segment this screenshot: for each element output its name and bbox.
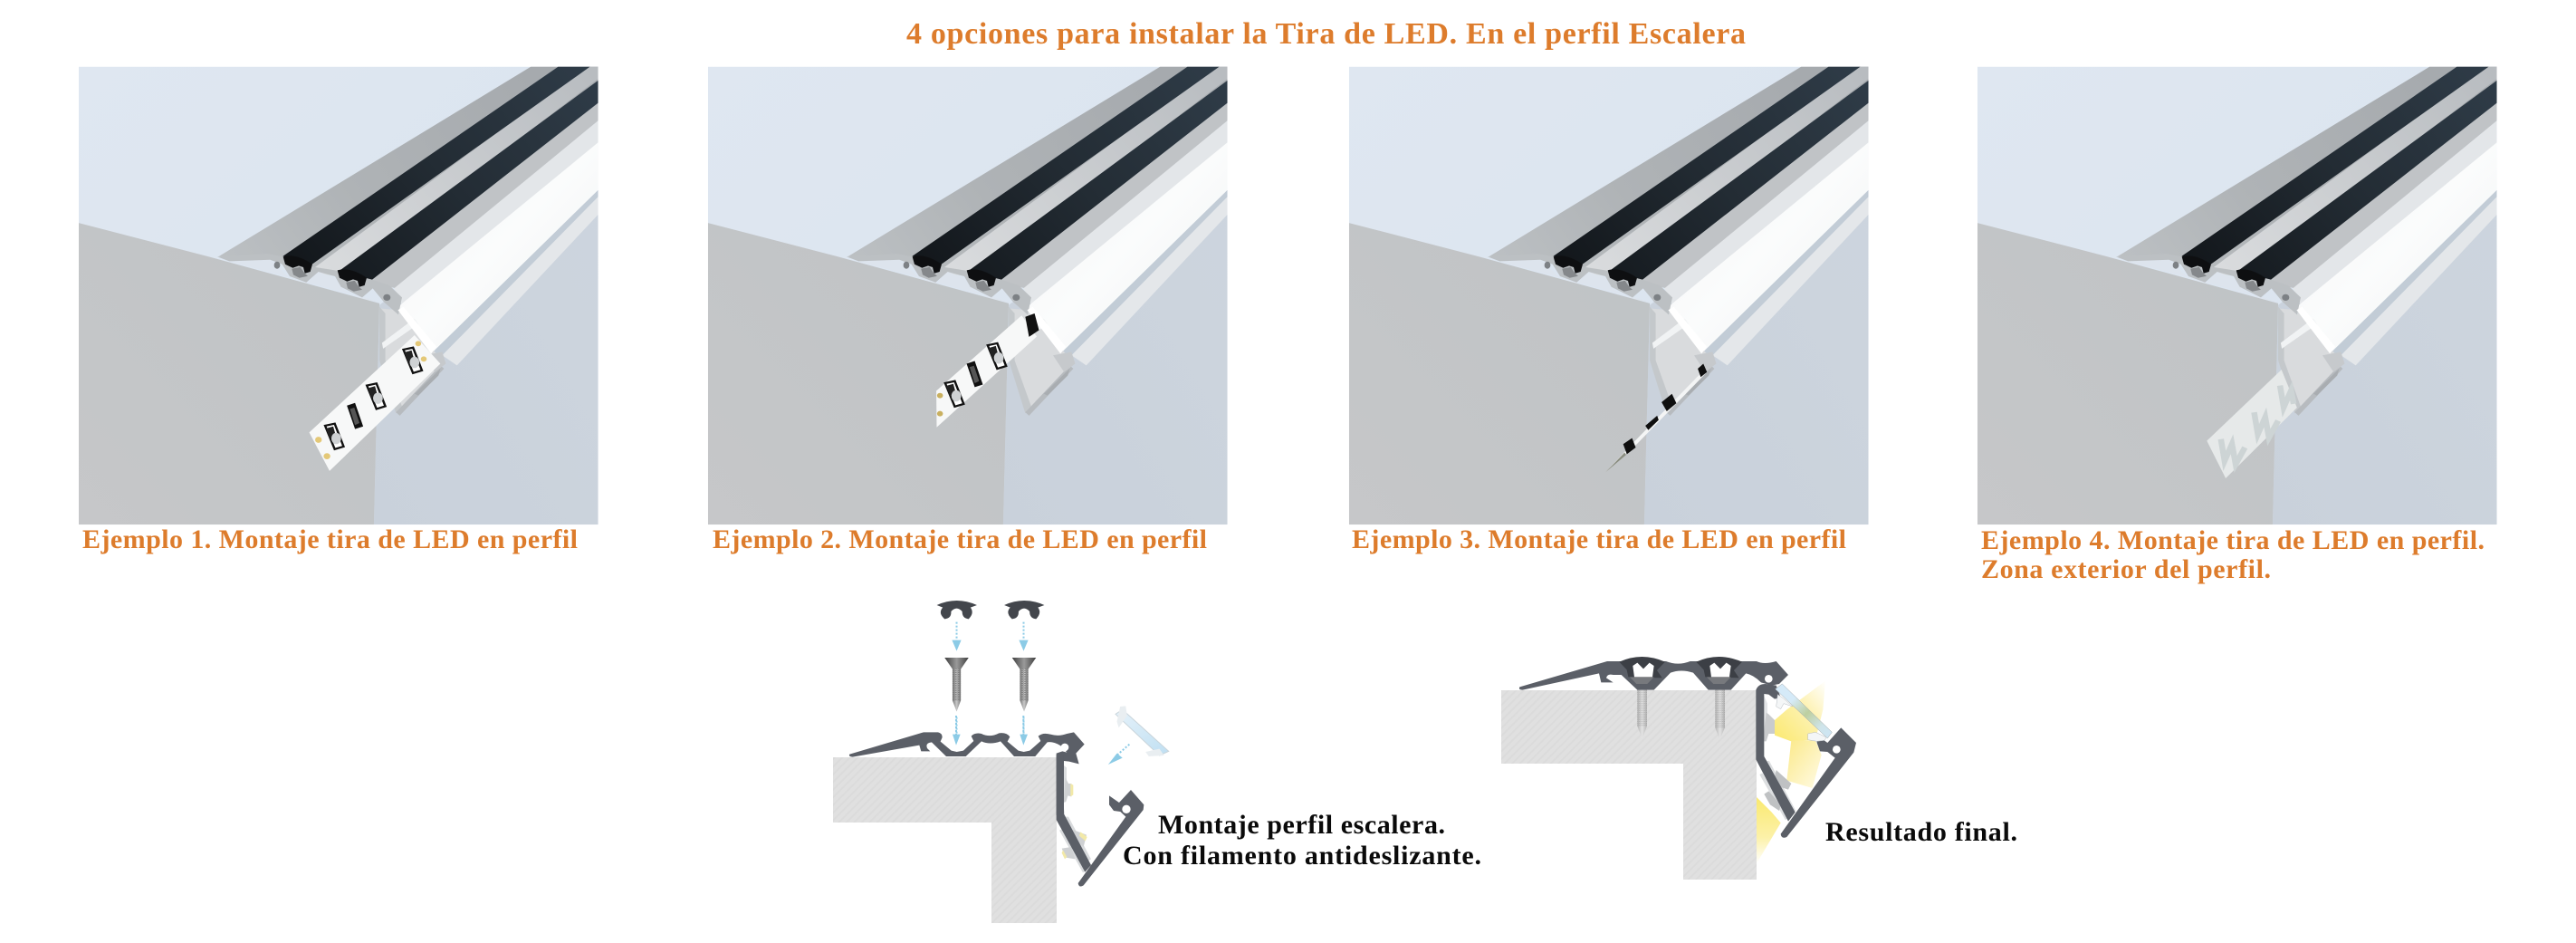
profile top: [1519, 661, 1788, 690]
led strip 1: [310, 335, 440, 471]
light beams and lower profile: [1756, 681, 1856, 863]
panel: ejemplo 2: [708, 67, 1228, 524]
label: montaje: [1123, 810, 1481, 871]
gasket caps: [937, 601, 1044, 619]
caption 4: [1981, 525, 2485, 584]
caption 4: Ejemplo 4. Montaje tira de LED en perfil.: [1981, 525, 2485, 555]
led strip 3, side view: [1605, 364, 1707, 472]
led strip 2: [936, 313, 1039, 428]
label: montaje: Montaje perfil escalera.: [1158, 810, 1445, 840]
concrete step: [1501, 690, 1757, 880]
concrete step: [833, 757, 1057, 923]
caption 2: Ejemplo 2. Montaje tira de LED en perfil: [713, 524, 1207, 554]
label: montaje: Con filamento antideslizante.: [1123, 841, 1481, 871]
title: 4 opciones para instalar la Tira de LED. En el perfil Escalera: [906, 17, 1746, 51]
adhesive tape: [2207, 370, 2297, 478]
aluminium profile lower with led chips: [1057, 755, 1144, 887]
caption 4: Zona exterior del perfil.: [1981, 554, 2271, 584]
label: resultado final: Resultado final.: [1825, 817, 2017, 847]
screws: [1637, 688, 1725, 740]
screws: [944, 658, 1036, 712]
diagram: resultado final: [1501, 657, 1856, 880]
panel: ejemplo 1: [79, 67, 599, 524]
dotted arrows: [957, 622, 1129, 756]
caption 1: Ejemplo 1. Montaje tira de LED en perfil: [82, 524, 578, 554]
diffuser: [1776, 684, 1832, 741]
caption 3: Ejemplo 3. Montaje tira de LED en perfil: [1352, 524, 1846, 554]
aluminium profile top: [849, 716, 1085, 815]
diffuser cover: [1116, 706, 1169, 756]
panel: ejemplo 3: [1349, 67, 1869, 524]
gaskets: [1619, 657, 1742, 684]
diagram: montaje perfil escalera: [833, 601, 1169, 923]
panel: ejemplo 4: [1977, 67, 2497, 524]
